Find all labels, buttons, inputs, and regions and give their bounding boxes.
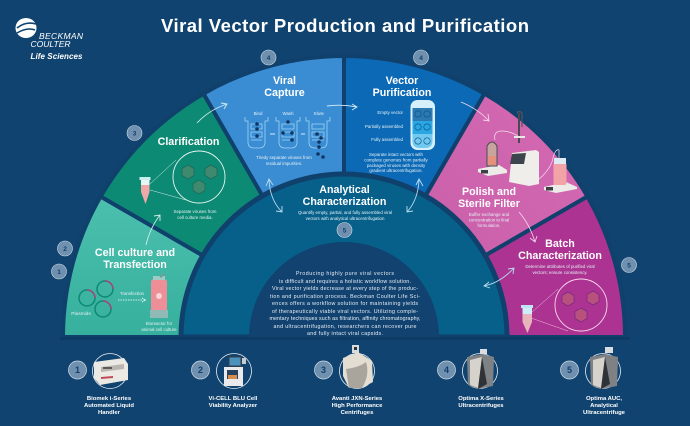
overview paragraph: of therapeutically viable viral vectors. Utilizing comple- — [272, 309, 418, 315]
icon: batch magnified view — [531, 279, 607, 331]
capture caption — [256, 155, 312, 166]
product 3: Avanti JXN-Series: Centrifuges — [341, 410, 374, 416]
icon: centrifuge tube with bands — [410, 100, 435, 150]
capture caption: residual impurities. — [266, 161, 302, 166]
purification caption: Separate intact vectors with — [369, 152, 424, 157]
analytical caption: Quantify empty, partial, and fully assembled viral — [298, 210, 392, 215]
overview paragraph: Viral vector yields decrease at every step of the produc- — [272, 286, 418, 292]
analytical caption: vectors with analytical ultracentrifugation — [306, 216, 385, 221]
column labels: Elute — [314, 111, 325, 116]
overview paragraph: and fully intact viral capsids. — [307, 331, 383, 337]
clarification caption: cell culture media. — [177, 215, 213, 220]
bioreactor caption — [141, 321, 177, 332]
analytical heading: Characterization — [303, 196, 386, 208]
polish caption — [469, 212, 510, 228]
step badge 4 capture — [261, 50, 276, 65]
step badge 4 purification: 4 — [419, 55, 423, 62]
product 2: Vi-CELL BLU — [192, 354, 258, 409]
arrow: clarification to capture — [197, 103, 227, 123]
batch heading — [518, 238, 602, 262]
icon: virus magnified view — [150, 151, 225, 203]
cell culture heading: Transfection — [103, 259, 167, 271]
product 4: Optima X-Series: Optima X-Series — [458, 396, 504, 402]
logo: Beckman Coulter Life Sciences: COULTER — [30, 39, 70, 49]
double arrow: batch and analytical — [484, 268, 514, 288]
overview paragraph: is difficult and requires a holistic workflow solution. — [279, 279, 411, 285]
panel: polish and sterile filter — [344, 94, 587, 337]
polish heading — [458, 186, 520, 210]
product 3: Avanti JXN-Series: Avanti JXN-Series — [332, 396, 383, 402]
viral capture heading — [264, 75, 305, 99]
icon: batch tube — [521, 305, 533, 333]
polish heading: Polish and — [462, 186, 516, 198]
overview paragraph: Producing highly pure viral vectors — [296, 271, 394, 277]
double arrow: purification and analytical — [407, 179, 423, 212]
panel: viral capture — [204, 56, 344, 337]
logo: Beckman Coulter Life Sciences: BECKMAN — [39, 31, 84, 41]
step badge 5 analytical: 5 — [343, 228, 347, 234]
polish caption: formulation. — [478, 223, 500, 228]
batch heading: Characterization — [518, 250, 602, 262]
logo: Beckman Coulter Life Sciences: Life Sciences — [30, 52, 83, 61]
purification labels — [365, 110, 404, 142]
column labels: Wash — [282, 111, 294, 116]
purification labels: Partially assembled — [365, 124, 404, 129]
panel: clarification — [101, 94, 344, 337]
overview paragraph: and ultracentrifugation, researchers can recover pure — [274, 324, 417, 330]
step badge 5 batch: 5 — [627, 262, 631, 270]
step badge 5 analytical — [337, 222, 352, 238]
clarification caption — [174, 209, 217, 220]
step badge 2 — [58, 241, 72, 256]
clarification caption: Separate viruses from — [174, 209, 217, 214]
step badge 1: 1 — [57, 269, 61, 276]
double arrow: capture and analytical — [266, 179, 282, 212]
step badge 2: 2 — [63, 246, 67, 253]
product 3: Avanti JXN-Series: 3 — [321, 365, 326, 375]
purification caption: packaged viruses with density — [367, 163, 426, 168]
plasmids label: Plasmids — [71, 311, 91, 317]
bioreactor caption: Bioreactor for — [146, 321, 173, 326]
overview paragraph — [270, 271, 420, 337]
polish caption: Buffer exchange and — [469, 212, 510, 217]
overview paragraph: mentary techniques such as filtration, affinity chromatography, — [270, 316, 420, 322]
vector purification heading: Purification — [373, 87, 431, 99]
analytical caption — [298, 210, 392, 221]
bioreactor caption: animal cell culture — [141, 327, 177, 332]
panel: overview semicircle — [249, 242, 439, 337]
purification caption: gradient ultracentrifugation. — [369, 168, 423, 173]
product 4: Optima X-Series — [438, 349, 504, 409]
purification caption: complete genomes from partially — [364, 158, 429, 162]
vector purification heading — [373, 75, 431, 99]
viral capture heading: Viral — [273, 75, 296, 87]
arrow: polish to batch — [519, 212, 537, 242]
title: Viral Vector Production and Purification — [161, 15, 529, 36]
product 1: Biomek i-Series: 1 — [75, 365, 80, 375]
panel: cell culture and transfection — [63, 196, 344, 337]
logo: Beckman Coulter Life Sciences — [16, 18, 84, 61]
icon: filtration apparatus — [478, 112, 577, 193]
cell culture heading — [95, 247, 175, 271]
batch caption — [525, 264, 595, 275]
product 2: Vi-CELL BLU: 2 — [198, 365, 203, 375]
step badge 4 purification — [414, 50, 428, 65]
product 1: Biomek i-Series: Automated Liquid — [84, 403, 134, 409]
step badge 5 batch — [622, 258, 636, 272]
batch caption: vectors; ensure consistency. — [532, 270, 588, 275]
clarification heading: Clarification — [158, 136, 219, 148]
column labels: Bind — [254, 111, 263, 116]
icon: capture columns — [245, 117, 330, 159]
arrow: culture to clarification — [146, 215, 160, 245]
overview paragraph: tion and purification process. Beckman Coulter Life Sci- — [270, 294, 420, 300]
product 2: Vi-CELL BLU: Vi-CELL BLU Cell — [209, 396, 258, 402]
panel: batch characterization — [344, 196, 625, 337]
product 5: Optima AUC: Optima AUC, — [586, 396, 622, 402]
arrow: purification to polish — [461, 102, 489, 121]
purification caption — [364, 152, 429, 173]
analytical heading: Analytical — [319, 184, 370, 196]
product 3: Avanti JXN-Series — [314, 345, 383, 416]
icon: plasmids — [79, 281, 113, 317]
step badge 3: 3 — [133, 130, 137, 138]
product 4: Optima X-Series: 4 — [444, 365, 449, 375]
product 5: Optima AUC: 5 — [567, 365, 572, 375]
purification labels: Fully assembled — [371, 137, 404, 142]
product 1: Biomek i-Series — [68, 354, 134, 416]
transfection label and arrow: Transfection — [120, 291, 145, 296]
batch heading: Batch — [545, 238, 575, 250]
panel: analytical characterization — [181, 174, 507, 337]
capture caption: Tiredy separate viruses from — [256, 155, 312, 160]
polish caption: concentration to final — [469, 218, 509, 222]
step badge 4 capture: 4 — [267, 55, 271, 62]
product 5: Optima AUC: Analytical — [590, 403, 618, 409]
analytical heading — [303, 184, 386, 208]
purification labels: Empty vector — [377, 110, 404, 115]
transfection label and arrow — [118, 291, 146, 302]
product 3: Avanti JXN-Series: High Performance — [332, 403, 383, 409]
overview paragraph: ences offers a workflow solution for maintaining yields — [272, 301, 418, 307]
step badge 3 — [127, 126, 142, 140]
polish heading: Sterile Filter — [458, 198, 520, 210]
icon: sample tube — [140, 177, 150, 204]
product 1: Biomek i-Series: Handler — [98, 410, 121, 416]
arrow: capture to purification — [327, 104, 357, 110]
step badge 1 — [52, 264, 66, 279]
product 2: Vi-CELL BLU: Viability Analyzer — [209, 403, 258, 409]
panel: vector purification — [344, 56, 484, 337]
viral capture heading: Capture — [264, 87, 305, 99]
column labels — [254, 111, 325, 116]
product 5: Optima AUC: Ultracentrifuge — [583, 410, 626, 416]
product 1: Biomek i-Series: Biomek i-Series — [87, 396, 132, 402]
batch caption: Determine attributes of purified viral — [525, 264, 595, 269]
product 4: Optima X-Series: Ultracentrifuges — [458, 403, 504, 409]
vector purification heading: Vector — [386, 75, 418, 87]
product 5: Optima AUC — [560, 347, 626, 416]
icon: bioreactor — [150, 274, 168, 318]
cell culture heading: Cell culture and — [95, 247, 175, 259]
